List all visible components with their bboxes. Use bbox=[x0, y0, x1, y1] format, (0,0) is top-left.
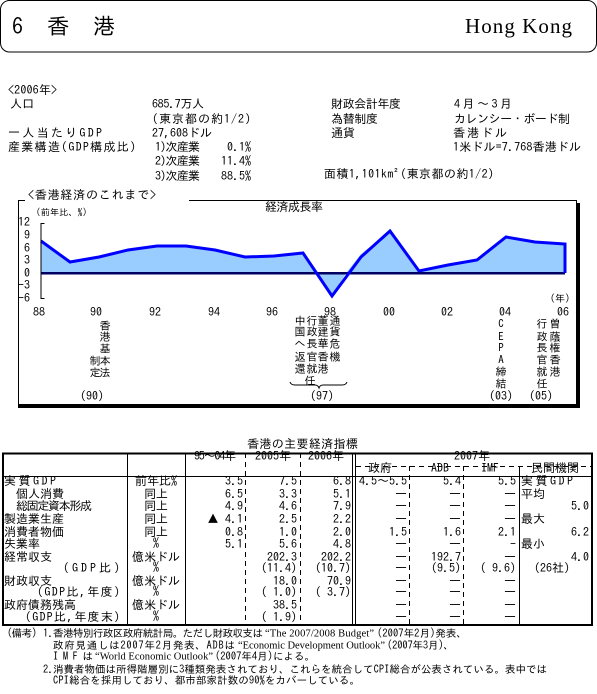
column: 2007 IMF: 5.5 bbox=[498, 475, 516, 487]
column: 2005: 1.0 bbox=[279, 526, 297, 538]
x axis labels: 04 bbox=[499, 306, 511, 318]
footnotes: 政府見通しは2007年2月発表、ADBは bbox=[53, 640, 235, 651]
panel: basic facts: 3)次産業 bbox=[155, 169, 200, 182]
column: 95-04: 6.5 bbox=[225, 488, 243, 500]
unit column: 億米ドル bbox=[132, 575, 180, 587]
event: 1997 handover, Tung takes office, currency crisis: 還 bbox=[294, 364, 306, 374]
column: 2007 private institutions: 平均 bbox=[521, 488, 545, 500]
panel: basic facts: 88.5% bbox=[221, 169, 251, 182]
column: 2006: 5.1 bbox=[333, 488, 351, 500]
column: 95-04: 3.5 bbox=[225, 475, 243, 487]
column: 2007 private institutions: (26社) bbox=[534, 561, 570, 574]
column: 2007 ADB: ― bbox=[449, 538, 461, 550]
column: 2007 government: 1.5 bbox=[389, 526, 407, 538]
event: Tsang takes office: 曽 bbox=[550, 318, 560, 330]
column: 2007 ADB: ― bbox=[449, 500, 461, 512]
column: 95-04: 0.8 bbox=[225, 526, 243, 538]
row labels: 消費者物価 bbox=[4, 526, 64, 538]
column: 2005: 18.0 bbox=[273, 575, 297, 587]
title banner: Hong Kong bbox=[465, 14, 572, 38]
column: 2006 bbox=[315, 475, 351, 598]
chart title: 経済成長率 bbox=[265, 201, 323, 213]
footnotes: 1. bbox=[43, 629, 54, 639]
table header: ADB bbox=[431, 462, 449, 474]
column: 2007 government: ― bbox=[395, 599, 407, 611]
unit column: 億米ドル bbox=[132, 551, 180, 563]
panel: basic facts: 1米ドル=7.768香港ドル bbox=[453, 141, 581, 153]
column: 2007 private institutions: 実質GDP bbox=[521, 475, 573, 487]
column: 2007 government: 4.5〜5.5 bbox=[359, 475, 407, 487]
panel: basic facts: 香港ドル bbox=[453, 127, 507, 139]
column: 2007 government: ― bbox=[395, 513, 407, 525]
table header: 2007年 bbox=[454, 449, 490, 462]
column: 2007 IMF: ― bbox=[504, 586, 516, 598]
y axis labels: 9 bbox=[24, 229, 30, 241]
column: 2005 bbox=[261, 475, 297, 623]
column: 2007 private institutions: 最大 bbox=[521, 513, 545, 525]
event: Tsang takes office: 任 bbox=[536, 378, 548, 390]
x axis labels: 98 bbox=[324, 306, 336, 318]
footnotes: “The 2007/2008 Budget” bbox=[265, 628, 374, 640]
y axis labels: 3 bbox=[24, 254, 30, 266]
table title: 香港の主要経済指標 bbox=[247, 438, 358, 450]
x axis labels bbox=[33, 293, 570, 318]
column: 2007 private institutions bbox=[521, 475, 589, 574]
row labels: 個人消費 bbox=[16, 488, 64, 500]
event: Tsang takes office: 行 bbox=[536, 318, 548, 330]
column: 2005: (11.4) bbox=[261, 561, 297, 574]
zero baseline bbox=[41, 272, 565, 274]
unit column: 前年比% bbox=[135, 474, 177, 487]
column: 2007 ADB bbox=[431, 475, 461, 623]
x axis labels: 96 bbox=[266, 306, 278, 318]
panel heading: history of the Hong Kong economy: <香港経済のこれまで> bbox=[28, 188, 156, 201]
footnotes: CPI総合を採用しており、都市部家計数の90%をカバーしている。 bbox=[53, 675, 360, 686]
y axis labels: (前年比、%) bbox=[36, 208, 87, 218]
panel: chart frame bbox=[18, 200, 580, 408]
column: 2007 ADB: ― bbox=[449, 599, 461, 611]
event: Tsang takes office: 港 bbox=[550, 366, 560, 378]
event: Basic Law enacted: 定 bbox=[90, 368, 100, 378]
line chart: economic growth rate bbox=[41, 224, 565, 298]
table header: 政府 bbox=[368, 462, 392, 474]
row labels: 財政収支 bbox=[4, 575, 52, 587]
column: 95-04: ▲ bbox=[207, 513, 219, 525]
panel: basic facts: 2)次産業 bbox=[155, 154, 200, 167]
footnotes: (2007年3月)、 bbox=[387, 640, 454, 651]
column: 2007 ADB: 1.6 bbox=[443, 526, 461, 538]
event: Basic Law enacted: 制 bbox=[90, 356, 100, 366]
row labels: 製造業生産 bbox=[4, 513, 64, 525]
column: 2007 IMF: - bbox=[510, 538, 516, 550]
footnotes: (2007年4月)による。 bbox=[215, 651, 315, 662]
x axis labels: 92 bbox=[149, 306, 161, 318]
event: Basic Law enacted: (90) bbox=[80, 389, 104, 402]
growth line bbox=[41, 231, 565, 296]
column: 2007 ADB: ― bbox=[449, 611, 461, 623]
event: CEPA concluded: 締 bbox=[496, 366, 506, 378]
column: 2007 ADB: ― bbox=[449, 513, 461, 525]
table grid bbox=[3, 453, 592, 625]
column: 2007 government: ― bbox=[395, 611, 407, 623]
panel: basic facts: 為替制度 bbox=[331, 113, 378, 125]
area fill bbox=[41, 231, 565, 296]
event: Tsang takes office: 蔭 bbox=[550, 332, 560, 342]
panel: basic facts: 財政会計年度 bbox=[331, 97, 401, 110]
column: 2007 private institutions: 最小 bbox=[521, 538, 545, 550]
row labels: (GDP比,年度) bbox=[37, 585, 120, 598]
x axis labels: 90 bbox=[90, 306, 102, 318]
unit column: % bbox=[153, 584, 159, 597]
unit column: 同上 bbox=[144, 488, 168, 500]
event: 1997 handover, Tung takes office, currency crisis: 董 bbox=[318, 316, 328, 326]
event: 1997 handover, Tung takes office, currency crisis: 貨 bbox=[330, 326, 340, 338]
column: 95-04: 5.1 bbox=[225, 538, 243, 550]
event: 1997 handover, Tung takes office, currency crisis: 任 bbox=[304, 374, 316, 386]
event: Basic Law enacted: 本 bbox=[100, 356, 110, 366]
column: 2006: 70.9 bbox=[327, 575, 351, 587]
panel: basic facts: 27,608ドル bbox=[152, 127, 212, 139]
column: 2007 private institutions: 4.0 bbox=[571, 551, 589, 563]
column: 2006: 6.8 bbox=[333, 475, 351, 487]
column: 2007 ADB: 5.4 bbox=[443, 475, 461, 487]
unit column: % bbox=[153, 560, 159, 573]
footnotes: 消費者物価は所得階層別に3種類発表されており、これらを統合してCPI総合が公表されている。表中では bbox=[53, 663, 547, 675]
event: CEPA concluded bbox=[489, 318, 513, 402]
panel: basic facts: 人口 bbox=[10, 98, 34, 110]
panel: basic facts: 4月〜3月 bbox=[454, 98, 512, 110]
event: 1997 handover, Tung takes office, currency crisis: 港 bbox=[318, 364, 328, 374]
footnotes: IMFは bbox=[53, 651, 93, 662]
panel: basic facts: カレンシー・ボード制 bbox=[454, 113, 570, 125]
event: 1997 handover, Tung takes office, currency crisis: (97) bbox=[310, 389, 334, 402]
y axis labels: -3 bbox=[18, 279, 30, 291]
unit column: 同上 bbox=[144, 500, 168, 512]
table header: 民間機関 bbox=[531, 462, 579, 474]
panel: basic facts: 産業構造(GDP構成比) bbox=[8, 140, 136, 153]
column: 95-04 bbox=[207, 475, 243, 550]
panel: basic facts: 1)次産業 bbox=[155, 140, 200, 153]
event: Basic Law enacted: 港 bbox=[100, 332, 110, 342]
column: 2007 ADB: 192.7 bbox=[431, 551, 461, 563]
column: 95-04: 4.9 bbox=[225, 500, 243, 512]
event: CEPA concluded: A bbox=[498, 354, 504, 366]
row labels: 経常収支 bbox=[4, 551, 52, 563]
panel: basic facts: 通貨 bbox=[331, 126, 355, 139]
column: 2005: 3.3 bbox=[279, 488, 297, 500]
column: 2007 government: ― bbox=[395, 575, 407, 587]
y axis labels bbox=[18, 208, 87, 304]
column: 2005: ( 1.9) bbox=[261, 610, 297, 623]
event: Basic Law enacted: 法 bbox=[100, 368, 110, 378]
event: 1997 handover, Tung takes office, currency crisis: 機 bbox=[330, 352, 340, 362]
row labels: 実質GDP bbox=[4, 475, 56, 487]
event: 1997 handover, Tung takes office, currency crisis: 長 bbox=[306, 338, 318, 350]
column: 2007 ADB: ― bbox=[449, 575, 461, 587]
x axis labels: 02 bbox=[441, 306, 453, 318]
event: Tsang takes office: 政 bbox=[536, 332, 548, 342]
column: 2007 government: ― bbox=[395, 488, 407, 500]
event: CEPA concluded: E bbox=[498, 332, 504, 342]
table header: IMF bbox=[481, 462, 499, 474]
column: 2005: 5.6 bbox=[279, 538, 297, 550]
event: 1997 handover, Tung takes office, currency crisis: 危 bbox=[330, 338, 340, 350]
column: 2007 ADB: ― bbox=[449, 586, 461, 598]
row labels: (GDP比,年度末) bbox=[25, 610, 120, 623]
column: 2006: ( 3.7) bbox=[315, 585, 351, 598]
column: 2007 IMF: ― bbox=[504, 599, 516, 611]
unit column: 同上 bbox=[144, 526, 168, 538]
event: Tsang takes office: (05) bbox=[529, 389, 553, 402]
unit column bbox=[132, 474, 180, 622]
column: 2007 ADB: (9.5) bbox=[431, 561, 461, 574]
panel: basic facts: 685.7万人 bbox=[152, 98, 204, 110]
footnotes bbox=[7, 627, 547, 686]
x axis labels: 06 bbox=[557, 306, 569, 318]
panel: basic facts: <2006年> bbox=[8, 83, 57, 96]
x axis labels: 00 bbox=[383, 306, 395, 318]
panel: basic facts: 0.1% bbox=[227, 140, 251, 153]
x axis labels: 94 bbox=[208, 306, 220, 318]
y axis labels: 6 bbox=[24, 242, 30, 254]
row labels bbox=[4, 475, 120, 623]
column: 2005: 4.6 bbox=[279, 500, 297, 512]
footnotes: (2007年2月)発表、 bbox=[377, 628, 467, 639]
event: CEPA concluded: C bbox=[498, 318, 504, 330]
column: 2007 IMF: ― bbox=[504, 575, 516, 587]
column: 2006: 2.2 bbox=[333, 513, 351, 525]
y axis labels: -6 bbox=[18, 292, 30, 304]
table header: 2005年 bbox=[255, 449, 291, 462]
column: 2007 IMF: 2.1 bbox=[498, 526, 516, 538]
y axis labels: 12 bbox=[18, 216, 30, 228]
column: 2006: 202.2 bbox=[321, 551, 351, 563]
event: 1997 handover, Tung takes office, currency crisis: 就 bbox=[306, 364, 318, 374]
column: 2006: 7.9 bbox=[333, 500, 351, 512]
column: 2007 government: ― bbox=[395, 562, 407, 574]
x axis labels: 88 bbox=[33, 306, 45, 318]
column: 2007 IMF: ― bbox=[504, 611, 516, 623]
row labels: 政府債務残高 bbox=[4, 599, 76, 611]
footnotes: 香港特別行政区政府統計局。ただし財政収支は bbox=[53, 627, 263, 639]
event: Tsang takes office: 香 bbox=[550, 354, 560, 366]
column: 2007 government: ― bbox=[395, 538, 407, 550]
panel: basic facts: 一人当たりGDP bbox=[8, 127, 102, 139]
event: 1997 handover, Tung takes office, currency crisis bbox=[290, 316, 347, 402]
column: 2007 government: ― bbox=[395, 551, 407, 563]
event: Basic Law enacted bbox=[80, 320, 110, 402]
event: 1997 handover, Tung takes office, currency crisis: 通 bbox=[330, 316, 340, 326]
x axis labels: (年) bbox=[550, 293, 570, 304]
column: 2006: (10.7) bbox=[315, 561, 351, 574]
event: 1997 handover, Tung takes office, currency crisis: 華 bbox=[318, 338, 328, 350]
event: Tsang takes office: 長 bbox=[536, 342, 548, 354]
row labels: 失業率 bbox=[4, 538, 40, 550]
column: 2007 government: ― bbox=[395, 500, 407, 512]
event: CEPA concluded: (03) bbox=[489, 389, 513, 402]
column: 2006: 4.8 bbox=[333, 538, 351, 550]
column: 2007 IMF: ― bbox=[504, 488, 516, 500]
column: 2005: 202.3 bbox=[267, 551, 297, 563]
column: 95-04: 4.1 bbox=[225, 513, 243, 525]
table header bbox=[194, 449, 579, 474]
column: 2005: 38.5 bbox=[273, 599, 297, 611]
event: Basic Law enacted: 香 bbox=[100, 320, 110, 332]
title banner: 6 香 港 bbox=[12, 15, 115, 37]
event: 1997 handover, Tung takes office, currency crisis: 国 bbox=[294, 326, 306, 338]
column: 2007 IMF: ― bbox=[504, 551, 516, 563]
event: Tsang takes office bbox=[529, 318, 560, 402]
column: 2006: 2.0 bbox=[333, 526, 351, 538]
y axis bbox=[41, 224, 44, 298]
event: Tsang takes office: 就 bbox=[536, 366, 548, 378]
event: Tsang takes office: 権 bbox=[550, 342, 560, 354]
panel: basic facts: 面積1,101km²(東京都の約1/2) bbox=[324, 167, 494, 180]
event: 1997 handover, Tung takes office, currency crisis: へ bbox=[294, 338, 306, 350]
footnotes: “World Economic Outlook” bbox=[95, 652, 213, 662]
event: CEPA concluded: P bbox=[498, 342, 504, 354]
event: 1997 handover, Tung takes office, currency crisis: 香 bbox=[318, 352, 328, 362]
table header: 2006年 bbox=[308, 449, 344, 462]
event: Basic Law enacted: 基 bbox=[100, 344, 110, 354]
event: 1997 handover, Tung takes office, currency crisis: 中 bbox=[294, 316, 306, 326]
event: 1997 handover, Tung takes office, currency crisis: 政 bbox=[306, 326, 318, 338]
column: 2007 IMF: ― bbox=[504, 513, 516, 525]
event: 1997 handover, Tung takes office, currency crisis: 返 bbox=[294, 350, 306, 362]
column: 2007 IMF: ― bbox=[504, 500, 516, 512]
panel: basic facts: (東京都の約1/2) bbox=[152, 112, 251, 125]
event: CEPA concluded: 結 bbox=[496, 378, 506, 390]
event: 1997 handover, Tung takes office, currency crisis: 建 bbox=[318, 326, 328, 338]
unit column: % bbox=[153, 609, 159, 622]
row labels: 総固定資本形成 bbox=[16, 500, 92, 512]
column: 2007 private institutions: 6.2 bbox=[571, 526, 589, 538]
title banner bbox=[0, 0, 596, 52]
column: 2005: 2.5 bbox=[279, 513, 297, 525]
column: 2007 private institutions: 5.0 bbox=[571, 500, 589, 512]
unit column: 億米ドル bbox=[132, 599, 180, 611]
y axis labels: 0 bbox=[24, 267, 30, 279]
row labels: (GDP比) bbox=[63, 561, 120, 574]
footnotes: “Economic Development Outlook” bbox=[238, 640, 385, 652]
column: 2005: ( 1.0) bbox=[261, 585, 297, 598]
footnotes: (備考) bbox=[7, 628, 37, 639]
unit column: 同上 bbox=[144, 513, 168, 525]
panel: basic facts: 11.4% bbox=[221, 154, 251, 167]
event: Tsang takes office: 官 bbox=[536, 354, 548, 366]
column: 2007 ADB: ― bbox=[449, 488, 461, 500]
column: 2007 government: ― bbox=[395, 586, 407, 598]
footnotes: 2. bbox=[43, 665, 54, 675]
table: main economic indicators bbox=[3, 449, 592, 625]
column: 2007 government bbox=[359, 475, 407, 623]
column: 2007 IMF bbox=[480, 475, 516, 623]
table header: 95〜04年 bbox=[194, 449, 236, 462]
unit column: % bbox=[153, 536, 159, 549]
column: 2007 IMF: ( 9.6) bbox=[480, 561, 516, 574]
event: 1997 handover, Tung takes office, currency crisis: 行 bbox=[306, 316, 318, 326]
panel: basic facts bbox=[8, 83, 581, 182]
column: 2005: 7.5 bbox=[279, 475, 297, 487]
event: 1997 handover, Tung takes office, currency crisis: 官 bbox=[306, 352, 318, 362]
